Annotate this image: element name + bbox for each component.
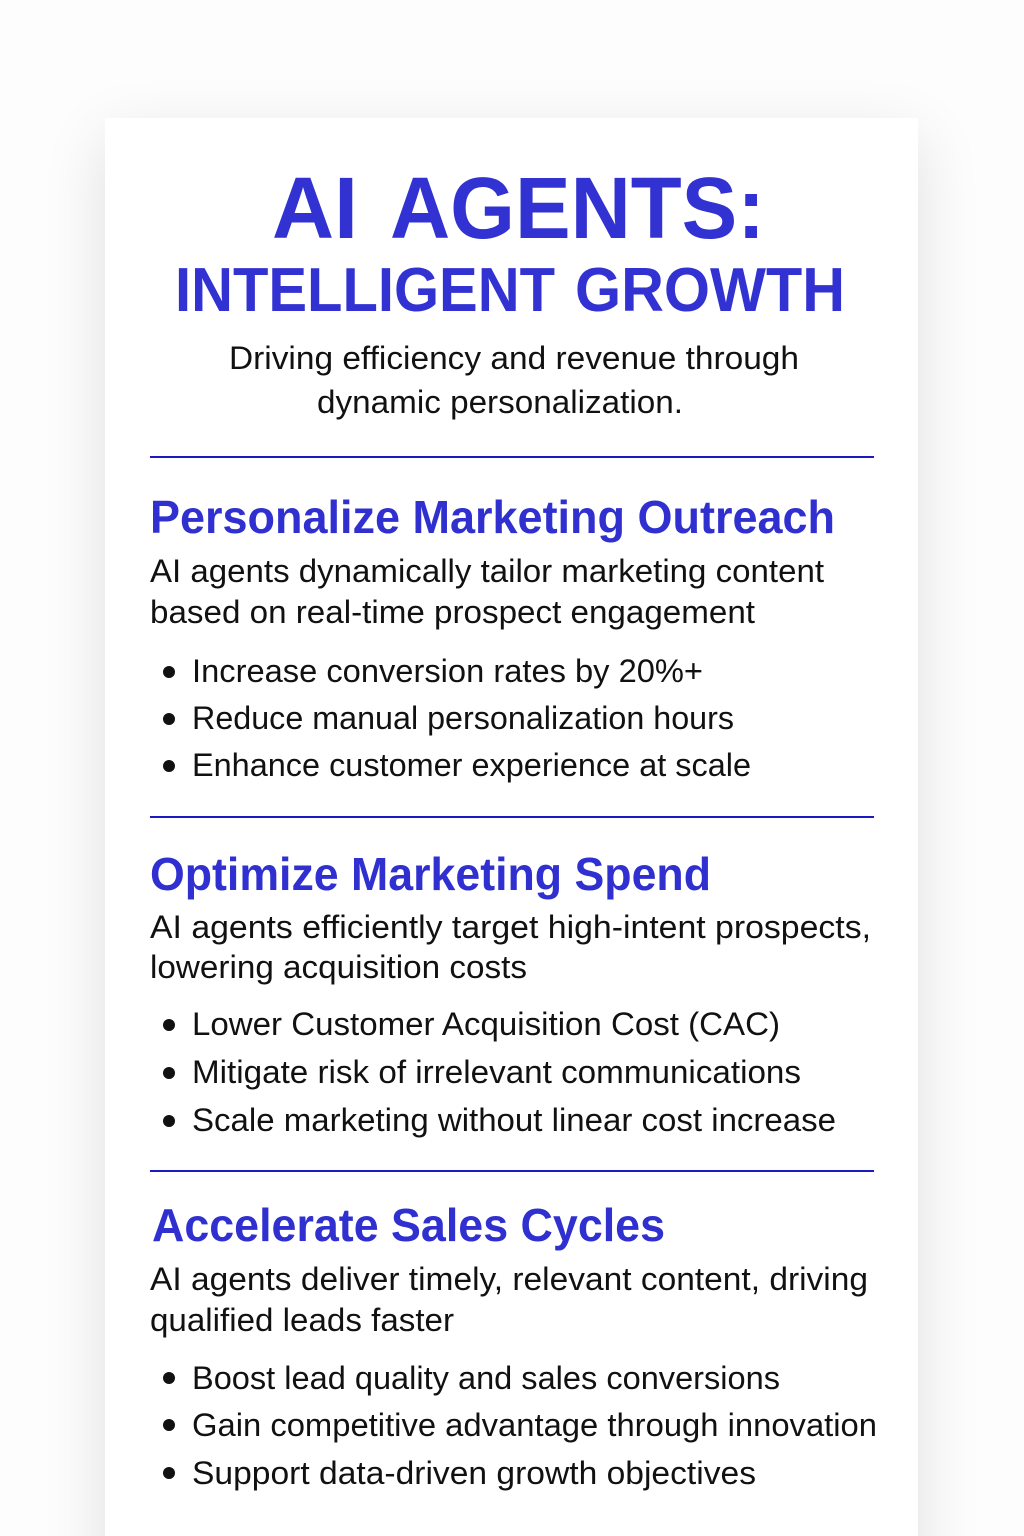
heading: personalize: Personalize Marketing Outreach	[150, 491, 835, 543]
bullet list: accelerate: Support data-driven growth objectives	[192, 1455, 756, 1491]
heading: optimize: Optimize Marketing Spend	[150, 848, 711, 900]
subtitle heading: INTELLIGENT	[175, 256, 555, 325]
bullet list: personalize: Reduce manual personalization hours	[192, 700, 734, 736]
heading: accelerate: Accelerate Sales Cycles	[152, 1199, 665, 1251]
description: personalize	[150, 553, 824, 630]
tagline: Driving efficiency and revenue through	[229, 340, 799, 376]
white card panel	[105, 118, 918, 1536]
title: AI	[272, 160, 358, 257]
description: optimize: lowering acquisition costs	[150, 949, 527, 985]
bullet list: optimize: Scale marketing without linear cost increase	[192, 1102, 836, 1138]
title: AGENTS:	[390, 160, 765, 257]
tagline: dynamic personalization.	[317, 384, 683, 420]
bullet list: personalize: Increase conversion rates by 20%+	[192, 653, 703, 689]
bullet list: accelerate: Boost lead quality and sales conversions	[192, 1360, 780, 1396]
bullet list: optimize	[163, 1006, 836, 1138]
bullet list: personalize	[163, 653, 751, 783]
description: personalize: AI agents dynamically tailor marketing content	[150, 553, 824, 589]
panel: accelerate sales cycles	[150, 1199, 877, 1491]
panel: optimize marketing spend	[150, 848, 871, 1138]
description: accelerate: AI agents deliver timely, relevant content, driving	[150, 1261, 868, 1297]
subtitle heading: GROWTH	[575, 256, 845, 325]
bullet list: optimize: Lower Customer Acquisition Cost (CAC)	[192, 1006, 780, 1042]
bullet list: personalize: Enhance customer experience at scale	[192, 747, 751, 783]
description: accelerate	[150, 1261, 868, 1338]
panel: personalize marketing outreach	[150, 491, 835, 783]
description: optimize: AI agents efficiently target high-intent prospects,	[150, 909, 871, 945]
bullet list: accelerate: Gain competitive advantage through innovation	[192, 1407, 877, 1443]
bullet list: accelerate	[163, 1360, 877, 1491]
description: accelerate: qualified leads faster	[150, 1302, 454, 1338]
description: optimize	[150, 909, 871, 985]
subtitle heading	[175, 256, 845, 325]
description: personalize: based on real-time prospect engagement	[150, 594, 755, 630]
tagline	[229, 340, 799, 420]
bullet list: optimize: Mitigate risk of irrelevant communications	[192, 1054, 801, 1090]
